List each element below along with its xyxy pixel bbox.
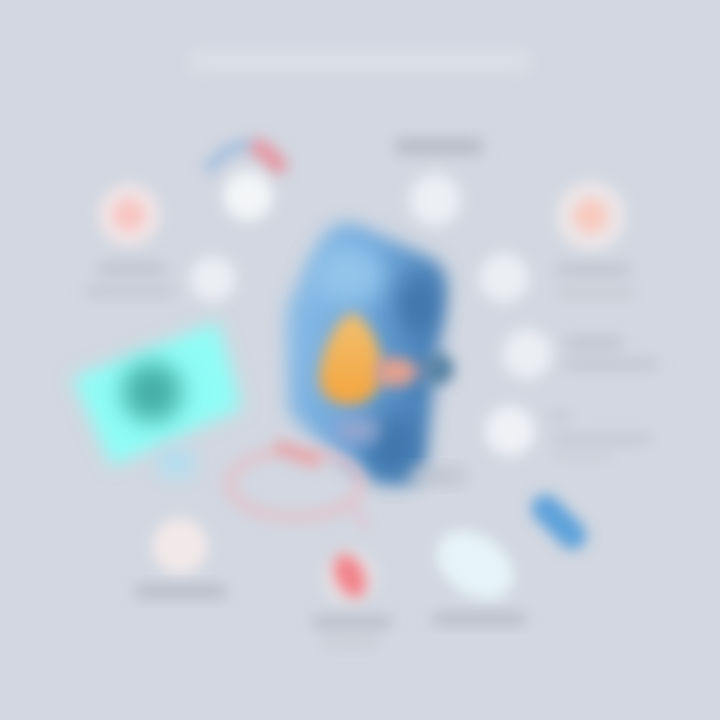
- icon: right node three: [485, 406, 535, 456]
- icon: top right pink circle: [556, 181, 626, 251]
- icon: right node two: [502, 329, 552, 379]
- arrow: red loop: [229, 446, 368, 528]
- icon: orange shield: [319, 312, 382, 405]
- icon: bottom right pale shape: [424, 517, 526, 613]
- icon: blue capsule: [526, 489, 592, 555]
- phone lower detail: [335, 418, 379, 442]
- icon: left node: [190, 256, 236, 302]
- card stand: [158, 448, 194, 478]
- text: bottom left: [135, 584, 227, 599]
- label under phone: [410, 468, 465, 484]
- icon: card emblem: [122, 362, 182, 422]
- icon: key connector: [373, 353, 454, 387]
- text block: right middle: [563, 337, 658, 370]
- text block: top right: [555, 263, 636, 298]
- heading: top centre: [395, 138, 483, 155]
- icon: bottom red drop: [323, 547, 377, 605]
- text: bottom right: [432, 612, 526, 626]
- icon: bottom left circle: [152, 518, 208, 574]
- icon: top centre circle: [409, 174, 461, 226]
- panel: teal card: [72, 322, 242, 478]
- gauge icon: [208, 145, 281, 221]
- icon: right node one: [479, 253, 529, 303]
- text: bottom centre: [312, 615, 392, 647]
- text block: right lower: [550, 412, 652, 460]
- panel: phone: [286, 223, 454, 484]
- text block: top left: [85, 262, 175, 297]
- icon: top left pink circle: [98, 184, 160, 246]
- title: [190, 50, 530, 73]
